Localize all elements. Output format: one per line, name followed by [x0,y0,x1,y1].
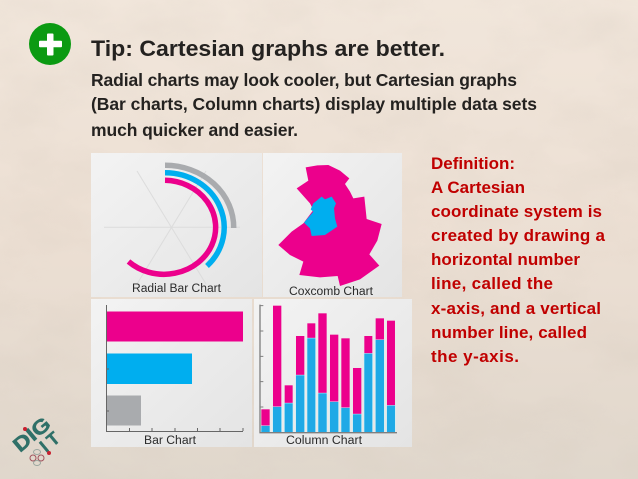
blue columns [261,338,395,432]
blue arc [165,173,224,266]
panel: radial bar chart [91,153,262,297]
text block: intro: Radial charts may look cooler, but Cartesian graphs [91,70,517,90]
text block: definition: A Cartesian [431,178,525,197]
text block: definition: the y-axis. [431,347,519,366]
text block: intro: much quicker and easier. [91,120,298,140]
logo: Dig It: IT [36,428,64,456]
panel: column chart [254,299,412,447]
logo flower [30,450,44,466]
pink arc [128,180,216,274]
text block: definition: line, called the [431,274,553,293]
gray bar [107,396,141,426]
pink wedges [278,165,382,286]
icon: green plus [29,23,71,65]
logo: Dig It: DIG [9,413,55,457]
title: Tip: Cartesian graphs are better. [91,36,445,61]
chart label: Coxcomb Chart [289,286,374,298]
text block: intro [91,70,537,140]
pink columns [261,306,395,432]
text block: intro: (Bar charts, Column charts) display multiple data sets [91,94,537,114]
chart label: Bar Chart [144,435,197,447]
chart label: Radial Bar Chart [132,283,222,295]
gray arc [165,165,234,228]
text block: definition: x-axis, and a vertical [431,299,601,318]
chart label: Column Chart [286,435,363,447]
text block: definition [431,154,606,366]
panel: bar chart [91,299,252,447]
logo: Dig It [9,413,64,466]
text block: definition: horizontal number [431,250,580,269]
text block: definition: number line, called [431,323,587,342]
blue wedges [304,197,337,236]
text block: definition: Definition: [431,154,515,173]
pink bar [107,312,243,342]
panel: coxcomb chart [263,153,402,298]
text block: definition: coordinate system is [431,202,602,221]
blue bar [107,354,192,384]
text block: definition: created by drawing a [431,226,606,245]
